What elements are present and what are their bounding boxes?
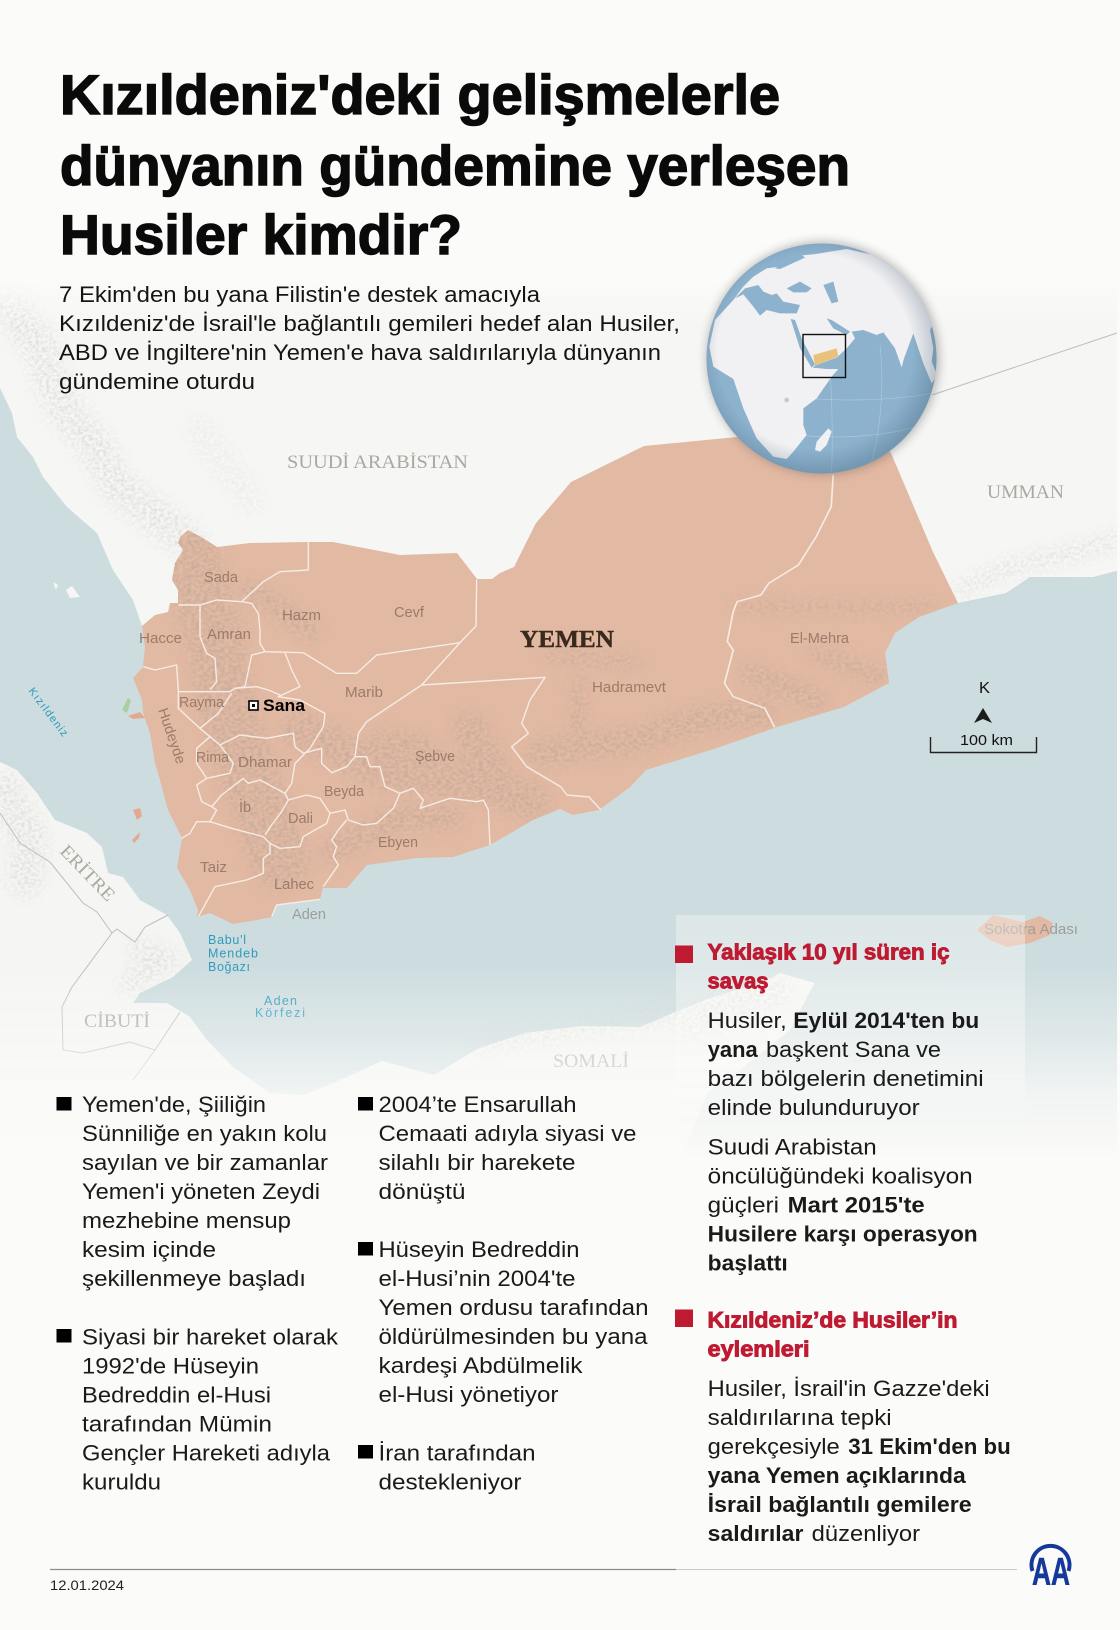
- right column: civil war: güçleri: [708, 1192, 779, 1218]
- right column: Red Sea actions: saldırılar: [708, 1521, 804, 1546]
- bullet list: middle column: İran tarafından: [378, 1440, 536, 1466]
- bullet list: middle column: 2004’te Ensarullah: [378, 1092, 576, 1117]
- right column: civil war: savaş: [708, 968, 768, 994]
- right column: Red Sea actions: düzenliyor: [812, 1521, 921, 1546]
- right column: Red Sea actions: 31 Ekim'den bu: [848, 1434, 1011, 1459]
- water labels: Boğazı: [208, 960, 250, 974]
- right column: civil war: Eylül 2014'ten bu: [793, 1008, 979, 1033]
- country labels: UMMAN: [987, 483, 1064, 503]
- logo: AA: AA: [1032, 1551, 1070, 1594]
- right column: Red Sea actions: Kızıldeniz’de Husiler’in: [708, 1308, 958, 1332]
- water labels: Kızıldeniz: [26, 686, 70, 739]
- bullet list: left column: tarafından Mümin: [82, 1412, 272, 1436]
- country borders on land: [0, 332, 1120, 1080]
- water labels: Körfezi: [255, 1006, 305, 1020]
- land: Horn of Africa: [0, 762, 815, 1095]
- right column: civil war: başkent Sana ve: [766, 1037, 941, 1062]
- right column: civil war: Mart 2015'te: [788, 1192, 925, 1218]
- right column: civil war: bazı bölgelerin denetimini: [708, 1066, 984, 1091]
- bullet list: middle column: öldürülmesinden bu yana: [378, 1324, 648, 1349]
- bullet list: middle column: el-Husi yönetiyor: [378, 1382, 559, 1407]
- capital marker: Sana: Sana: [263, 697, 306, 715]
- bullet list: left column: kuruldu: [82, 1470, 161, 1494]
- bullet list: left column: Siyasi bir hareket olarak: [82, 1324, 339, 1350]
- right column: civil war: başlattı: [708, 1250, 788, 1276]
- governorate labels: Hazm: [282, 608, 321, 624]
- right column: Red Sea actions: saldırılarına tepki: [708, 1405, 892, 1430]
- bullet list: left column: Bedreddin el-Husi: [82, 1382, 271, 1408]
- governorate labels: Rima: [196, 750, 230, 766]
- bullet list: left column: Sünniliğe en yakın kolu: [82, 1121, 327, 1146]
- bullet list: left column: 1992'de Hüseyin: [82, 1354, 259, 1378]
- right column: civil war: öncülüğündeki koalisyon: [708, 1164, 973, 1188]
- date: 12.01.2024: [50, 1578, 125, 1593]
- bullet list: left column: Gençler Hareketi adıyla: [82, 1440, 331, 1466]
- bullet list: middle column: destekleniyor: [378, 1470, 522, 1494]
- title: [60, 63, 850, 266]
- bullet list: left column: sayılan ve bir zamanlar: [82, 1150, 329, 1175]
- governorate labels: Dali: [288, 811, 313, 827]
- water labels: Mendeb: [208, 946, 258, 960]
- right column: Red Sea actions: yana Yemen açıklarında: [708, 1463, 966, 1488]
- Yemen terrain relief: [190, 555, 935, 860]
- land relief: [5, 300, 1120, 1045]
- governorate labels: Dhamar: [238, 755, 292, 771]
- bullet list: middle column: Cemaati adıyla siyasi ve: [378, 1121, 636, 1146]
- label: Yemen: YEMEN: [520, 626, 614, 653]
- governorate labels: Şebve: [415, 749, 455, 765]
- logo: AA: [1032, 1546, 1070, 1594]
- right column: civil war: Husiler,: [708, 1008, 787, 1033]
- north arrow and scale: [930, 680, 1036, 752]
- bullet list: middle column: [358, 1092, 648, 1494]
- bullet list: left column: Yemen'de, Şiiliğin: [82, 1092, 266, 1117]
- governorate labels: Hacce: [139, 631, 182, 647]
- north arrow and scale: K: [979, 680, 990, 697]
- right column: Red Sea actions: eylemleri: [708, 1336, 810, 1362]
- governorate labels: Cevf: [394, 605, 425, 621]
- country labels: ERİTRE: [55, 841, 119, 906]
- intro text: gündemine oturdu: [59, 369, 255, 394]
- governorate labels: Amran: [207, 627, 251, 643]
- title: Husiler kimdir?: [60, 203, 462, 266]
- title: Kızıldeniz'deki gelişmelerle: [60, 63, 780, 126]
- right column: Red Sea actions: gerekçesiyle: [708, 1434, 840, 1459]
- land: Arabian Peninsula: [0, 289, 1117, 626]
- governorate labels: Beyda: [324, 784, 365, 800]
- intro text: [59, 282, 680, 394]
- right column: civil war: Yaklaşık 10 yıl süren iç: [708, 940, 950, 964]
- locator globe: [706, 242, 939, 474]
- north arrow and scale: 100 km: [960, 732, 1013, 749]
- translucent panel behind right column: [676, 915, 1025, 1135]
- bullet list: left column: şekillenmeye başladı: [82, 1266, 306, 1291]
- bullet list: middle column: silahlı bir harekete: [378, 1150, 576, 1175]
- right column: civil war: elinde bulunduruyor: [708, 1095, 920, 1120]
- country labels: SUUDİ ARABİSTAN: [287, 452, 468, 473]
- bullet list: middle column: Hüseyin Bedreddin: [378, 1237, 580, 1262]
- intro text: 7 Ekim'den bu yana Filistin'e destek amacıyla: [59, 282, 541, 307]
- bullet list: middle column: kardeşi Abdülmelik: [378, 1353, 583, 1378]
- islands: [53, 582, 145, 843]
- governorate labels: Ebyen: [378, 835, 418, 851]
- right column: civil war: [675, 940, 984, 1276]
- governorate labels: Sada: [204, 570, 239, 586]
- bullet list: left column: [56, 1092, 339, 1494]
- governorate labels: Sokotra Adası: [984, 922, 1078, 938]
- governorate labels: Lahec: [274, 877, 314, 893]
- governorate labels: Hudeyde: [154, 706, 188, 766]
- right column: civil war: Husilere karşı operasyon: [708, 1222, 978, 1246]
- bullet list: left column: Yemen'i yöneten Zeydi: [82, 1179, 320, 1204]
- intro text: ABD ve İngiltere'nin Yemen'e hava saldırılarıyla dünyanın: [59, 340, 661, 365]
- Yemen territory: [133, 437, 958, 924]
- title: dünyanın gündemine yerleşen: [60, 134, 850, 197]
- governorate labels: El-Mehra: [790, 631, 850, 647]
- bullet list: left column: mezhebine mensup: [82, 1208, 291, 1233]
- right column: civil war: yana: [708, 1037, 758, 1062]
- bullet list: middle column: el-Husi’nin 2004'te: [378, 1266, 576, 1291]
- intro text: Kızıldeniz'de İsrail'le bağlantılı gemileri hedef alan Husiler,: [59, 311, 680, 336]
- right column: Red Sea actions: Husiler, İsrail'in Gazze'deki: [708, 1376, 990, 1401]
- globe land and seas: [709, 249, 937, 472]
- country labels: [55, 452, 1064, 1072]
- water labels: [26, 686, 305, 1020]
- right column: Red Sea actions: [675, 1308, 1011, 1546]
- footer rule: [50, 1568, 1017, 1570]
- locator square: [803, 334, 846, 378]
- sea: [0, 388, 1117, 1106]
- map of Yemen and surroundings: [0, 280, 1120, 1160]
- governorate labels: Rayma: [179, 695, 225, 711]
- water labels: Aden: [264, 994, 297, 1008]
- governorate labels: Marib: [345, 685, 383, 701]
- governorate labels: Hadramevt: [592, 680, 666, 696]
- governorate labels: İb: [239, 798, 251, 816]
- right column: Red Sea actions: İsrail bağlantılı gemilere: [708, 1492, 972, 1517]
- governorate borders: [143, 542, 601, 917]
- capital marker: Sana: [248, 700, 306, 711]
- governorate labels: Aden: [292, 907, 326, 923]
- governorate labels: Taiz: [200, 860, 227, 876]
- bullet list: middle column: dönüştü: [378, 1179, 466, 1204]
- bullet list: left column: kesim içinde: [82, 1237, 216, 1262]
- Socotra island: [977, 915, 1053, 947]
- country labels: CİBUTİ: [84, 1011, 150, 1032]
- governorate labels: [139, 570, 1078, 938]
- country labels: SOMALİ: [553, 1051, 629, 1072]
- right column: civil war: Suudi Arabistan: [708, 1134, 877, 1160]
- bullet list: middle column: Yemen ordusu tarafından: [378, 1295, 648, 1320]
- water labels: Babu'l: [208, 933, 246, 947]
